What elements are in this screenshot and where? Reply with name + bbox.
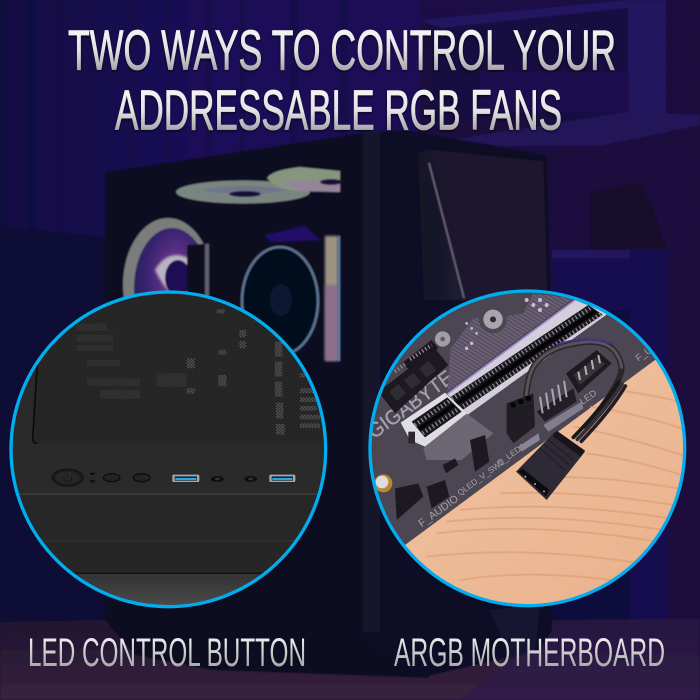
silkscreen board text: D_LED1	[495, 441, 527, 468]
RGB RAM strip	[325, 236, 340, 361]
small screw	[435, 331, 450, 347]
motherboard heatsink plate	[447, 293, 573, 392]
USB port right	[269, 475, 295, 482]
standoff screw	[479, 310, 507, 334]
power button	[52, 469, 83, 486]
brick wall and shelves	[420, 0, 700, 620]
label: LED control button: LED CONTROL BUTTON	[28, 631, 306, 675]
perforation highlights	[187, 309, 320, 435]
dark sofa block lower left	[0, 226, 105, 620]
pin header block	[537, 381, 577, 422]
panel: LED control button photo circle	[9, 290, 328, 608]
audio jack right	[244, 476, 257, 482]
LED indicators	[90, 473, 95, 482]
top ring fans	[176, 167, 342, 204]
faint perforation clusters	[77, 323, 187, 399]
plate solder pads	[465, 298, 549, 350]
silkscreen board text	[363, 345, 654, 530]
silkscreen board text: LED	[578, 388, 599, 407]
F_LED label patch	[518, 433, 540, 452]
wood desk	[405, 360, 683, 604]
front panel of case	[362, 130, 552, 678]
large ring fan	[123, 218, 213, 352]
CPU cooler and fan	[187, 226, 322, 355]
silkscreen board text: F_U	[634, 345, 654, 363]
shrouded header	[566, 350, 612, 393]
title	[68, 18, 616, 142]
mesh front panel	[32, 287, 333, 443]
transparent clip	[423, 413, 493, 460]
LED control buttons	[103, 474, 150, 482]
control strip band	[0, 444, 350, 494]
USB port left	[172, 475, 199, 482]
panel: ARGB motherboard photo circle	[368, 289, 686, 608]
short PCIe slot	[401, 393, 467, 447]
glass side panel	[105, 133, 430, 678]
long PCIe slot	[447, 300, 608, 415]
curtain	[0, 0, 420, 240]
label patch on board	[543, 402, 583, 432]
capacitor	[374, 474, 392, 492]
3-pin header plug	[507, 393, 535, 443]
ARGB cable wires	[526, 340, 625, 441]
silkscreen board text: QLED_V_SW1	[455, 457, 506, 498]
jumper blocks	[395, 435, 489, 520]
lower case bands	[0, 494, 350, 541]
silkscreen board text: GIGABYTE	[363, 366, 458, 443]
audio jack left	[211, 476, 224, 482]
desk	[0, 619, 700, 700]
PCIe x1 slots on left	[378, 340, 448, 413]
ARGB connector	[516, 431, 585, 500]
silkscreen board text: F_AUDIO	[416, 493, 461, 530]
